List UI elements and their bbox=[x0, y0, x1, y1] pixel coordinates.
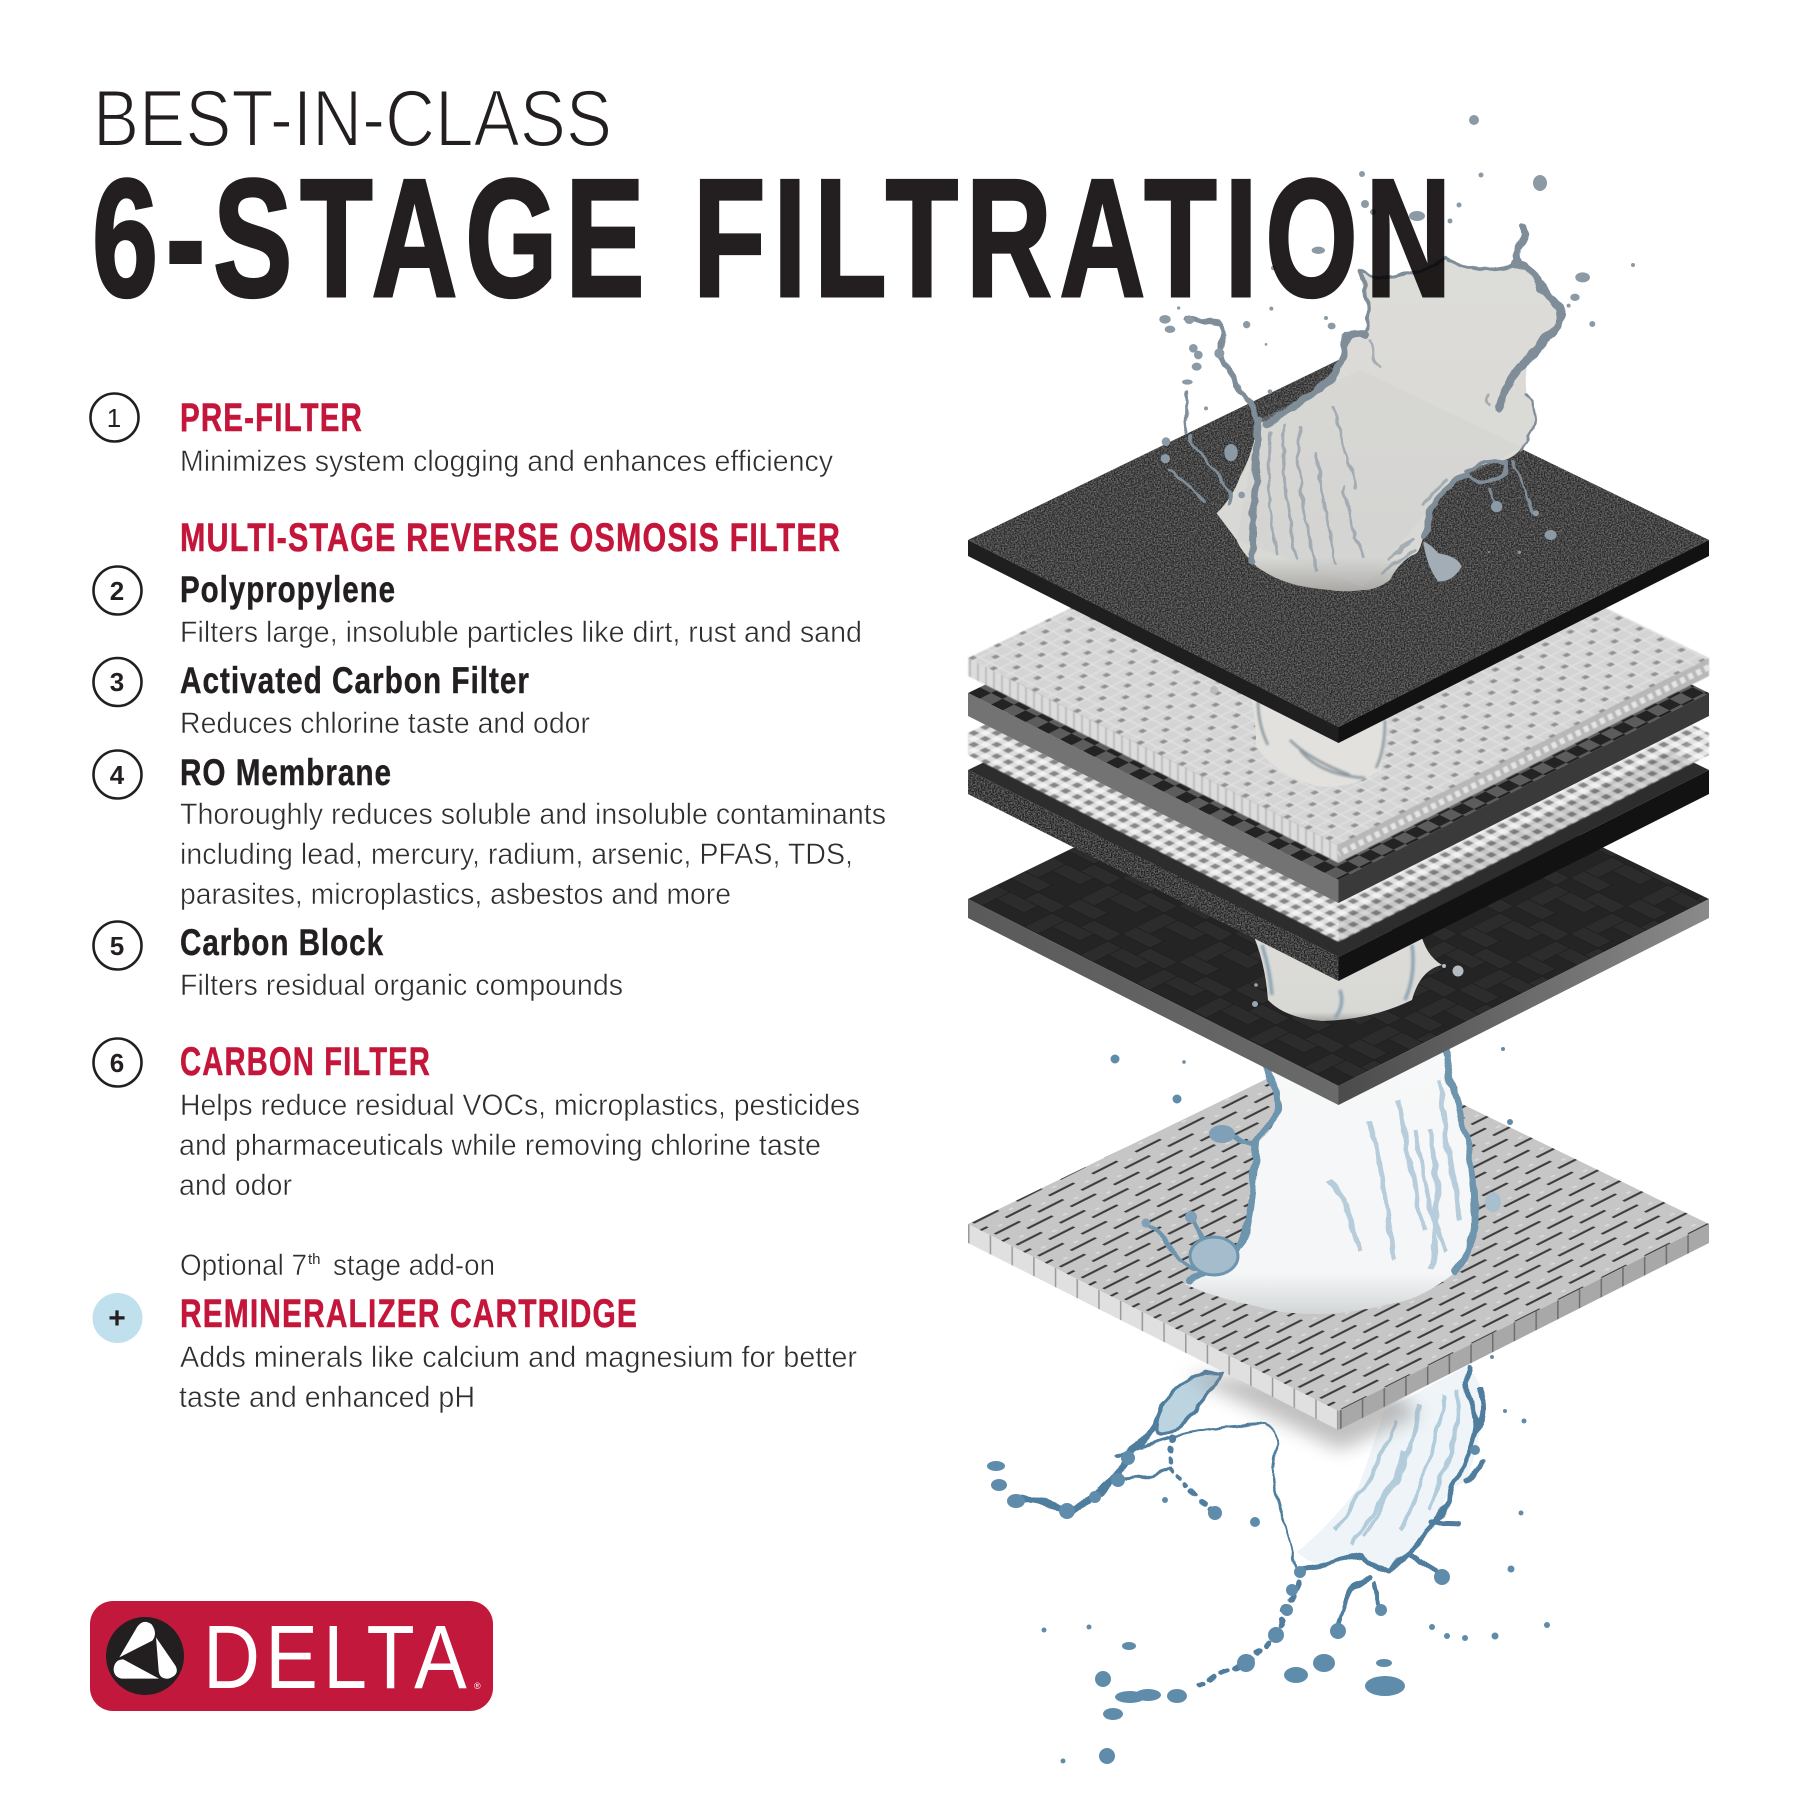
stage 4: RO membrane: including lead, mercury, radium, arsenic, PFAS, TDS, bbox=[180, 838, 853, 871]
water splash: top bbox=[1159, 227, 1595, 591]
optional add-on: remineralizer cartridge: Optional 7 bbox=[180, 1249, 307, 1282]
optional add-on: remineralizer cartridge: + bbox=[108, 1302, 126, 1335]
stage 2: polypropylene bbox=[94, 566, 862, 649]
stage 1: pre-filter: 1 bbox=[107, 403, 121, 433]
stage 1: pre-filter: PRE-FILTER bbox=[180, 396, 363, 440]
stage 1: pre-filter: Minimizes system clogging and enhances efficiency bbox=[180, 445, 833, 478]
filter layer 6: dark herringbone plate bbox=[968, 719, 1709, 1105]
optional add-on: remineralizer cartridge: Adds minerals like calcium and magnesium for better bbox=[180, 1341, 857, 1374]
filter layer 4: white woven plate bbox=[968, 553, 1709, 942]
stage 3: activated carbon filter: 3 bbox=[110, 667, 124, 697]
water falling onto grey plate bbox=[1142, 1040, 1501, 1314]
Delta logo bbox=[90, 1601, 493, 1711]
stage 2: polypropylene: Filters large, insoluble particles like dirt, rust and sand bbox=[180, 616, 862, 649]
title bbox=[92, 74, 1459, 332]
optional add-on: remineralizer cartridge bbox=[92, 1249, 857, 1414]
stage 4: RO membrane: RO Membrane bbox=[180, 752, 392, 793]
title: BEST-IN-CLASS bbox=[93, 74, 612, 164]
water on herringbone plate bbox=[1251, 930, 1464, 1021]
optional add-on: remineralizer cartridge: stage add-on bbox=[333, 1249, 495, 1282]
stage 6: carbon filter: Helps reduce residual VOCs, microplastics, pesticides bbox=[180, 1089, 860, 1122]
stage 6: carbon filter: and odor bbox=[179, 1169, 292, 1202]
stage 4: RO membrane: parasites, microplastics, asbestos and more bbox=[180, 878, 731, 911]
stage 5: carbon block bbox=[94, 922, 623, 1002]
small droplets above splash bbox=[1359, 115, 1635, 267]
Delta logo: ® bbox=[474, 1681, 481, 1691]
water on woven plate bbox=[1210, 686, 1392, 787]
stage 3: activated carbon filter: Activated Carbon Filter bbox=[180, 660, 530, 701]
optional add-on: remineralizer cartridge: th bbox=[308, 1251, 321, 1268]
stage 1: pre-filter bbox=[90, 394, 833, 478]
optional add-on: remineralizer cartridge: REMINERALIZER CARTRIDGE bbox=[180, 1292, 638, 1336]
stage 2: polypropylene: Polypropylene bbox=[180, 569, 396, 610]
stage 3: activated carbon filter bbox=[94, 658, 590, 740]
Delta logo: DELTA bbox=[203, 1608, 472, 1708]
water splash: bottom bbox=[987, 1047, 1550, 1764]
optional add-on: remineralizer cartridge: taste and enhanced pH bbox=[179, 1381, 475, 1414]
stage 6: carbon filter bbox=[94, 1038, 860, 1202]
stage 3: activated carbon filter: Reduces chlorine taste and odor bbox=[180, 707, 590, 740]
stage 6: carbon filter: CARBON FILTER bbox=[180, 1040, 431, 1084]
stage 5: carbon block: 5 bbox=[110, 931, 124, 961]
stage 4: RO membrane bbox=[94, 750, 886, 911]
stage 4: RO membrane: Thoroughly reduces soluble and insoluble contaminants bbox=[180, 798, 886, 831]
stage 4: RO membrane: 4 bbox=[110, 760, 125, 790]
filter layer 1: black textured plate bbox=[968, 360, 1709, 743]
filter layer 5: black foam plate bbox=[968, 590, 1709, 981]
stage 6: carbon filter: 6 bbox=[110, 1048, 124, 1078]
stage 5: carbon block: Filters residual organic compounds bbox=[180, 969, 623, 1002]
shadow beneath grey layer bbox=[1185, 1375, 1420, 1450]
stage 6: carbon filter: and pharmaceuticals while removing chlorine taste bbox=[179, 1129, 821, 1162]
filter layer 7: grey perforated plate bbox=[968, 1044, 1709, 1430]
filter layer 2: grey woven plate bbox=[968, 478, 1709, 863]
stage 5: carbon block: Carbon Block bbox=[180, 922, 384, 963]
filter layer 3: carbon checker plate bbox=[968, 513, 1709, 903]
heading: multi-stage reverse osmosis filter: MULTI-STAGE REVERSE OSMOSIS FILTER bbox=[180, 516, 841, 560]
stage 2: polypropylene: 2 bbox=[110, 576, 124, 606]
